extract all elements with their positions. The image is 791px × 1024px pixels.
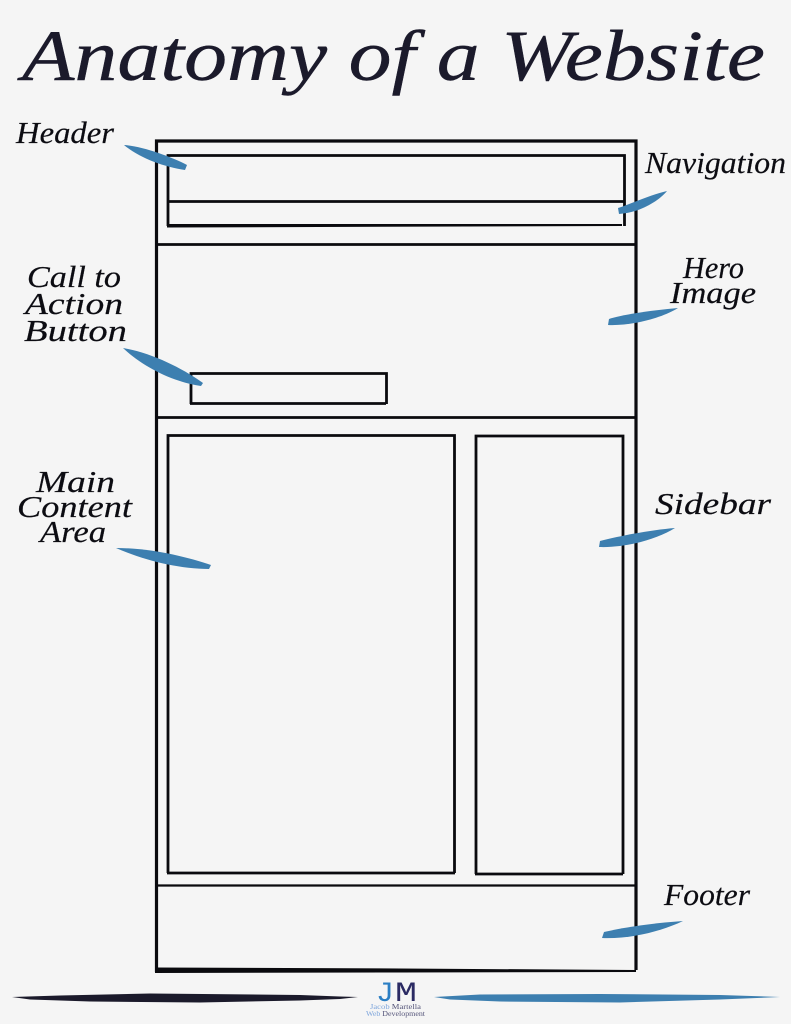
label: Main Content Area: Content <box>17 489 134 524</box>
arrow: Navigation <box>618 191 667 214</box>
wireframe: page outline <box>156 141 636 972</box>
label: Footer: Footer <box>663 877 751 912</box>
label: Hero Image: Hero <box>682 250 744 285</box>
wireframe: main content area <box>167 436 455 873</box>
arrow: Sidebar <box>599 528 675 547</box>
wireframe: call to action button <box>190 374 386 404</box>
arrow: Call to Action <box>123 348 203 386</box>
wireframe: hero image area <box>156 244 635 418</box>
logo <box>366 979 426 1018</box>
label: Main Content Area <box>17 464 134 549</box>
label: Call to Action Button: Action <box>23 286 123 321</box>
website wireframe <box>155 141 636 973</box>
arrow: Hero Image <box>608 308 678 325</box>
label: Sidebar: Sidebar <box>655 486 772 521</box>
logo: Jacob Martella: Jacob Martella <box>370 1002 422 1011</box>
arrow: Main Content Area <box>116 548 211 569</box>
wireframe: header box <box>168 156 624 226</box>
title: Anatomy of a Website <box>17 16 765 96</box>
label: Call to Action Button: Button <box>24 313 127 348</box>
wireframe: bottom edge <box>155 968 636 973</box>
label: Call to Action Button <box>23 259 127 348</box>
wireframe: sidebar <box>475 436 623 874</box>
logo: Web Development: Web Development <box>366 1009 426 1018</box>
label: Call to Action Button: Call to <box>27 259 121 294</box>
arrow: Header <box>124 145 187 170</box>
bottom stroke: dark <box>12 994 358 1002</box>
logo: J: J <box>376 979 394 1010</box>
bottom stroke: blue <box>434 994 780 1002</box>
wireframe: header box bottom edge <box>167 224 622 228</box>
label: Hero Image <box>669 250 756 310</box>
label: Header: Header <box>15 115 115 150</box>
label: Navigation: Navigation <box>644 145 786 180</box>
label: Hero Image: Image <box>669 275 756 310</box>
wireframe: footer <box>156 884 635 887</box>
label: Main Content Area: Area <box>38 514 106 549</box>
label: Main Content Area: Main <box>35 464 115 499</box>
wireframe: navigation bar <box>168 200 624 203</box>
logo: M: M <box>395 979 417 1010</box>
arrow: Footer <box>602 921 683 938</box>
